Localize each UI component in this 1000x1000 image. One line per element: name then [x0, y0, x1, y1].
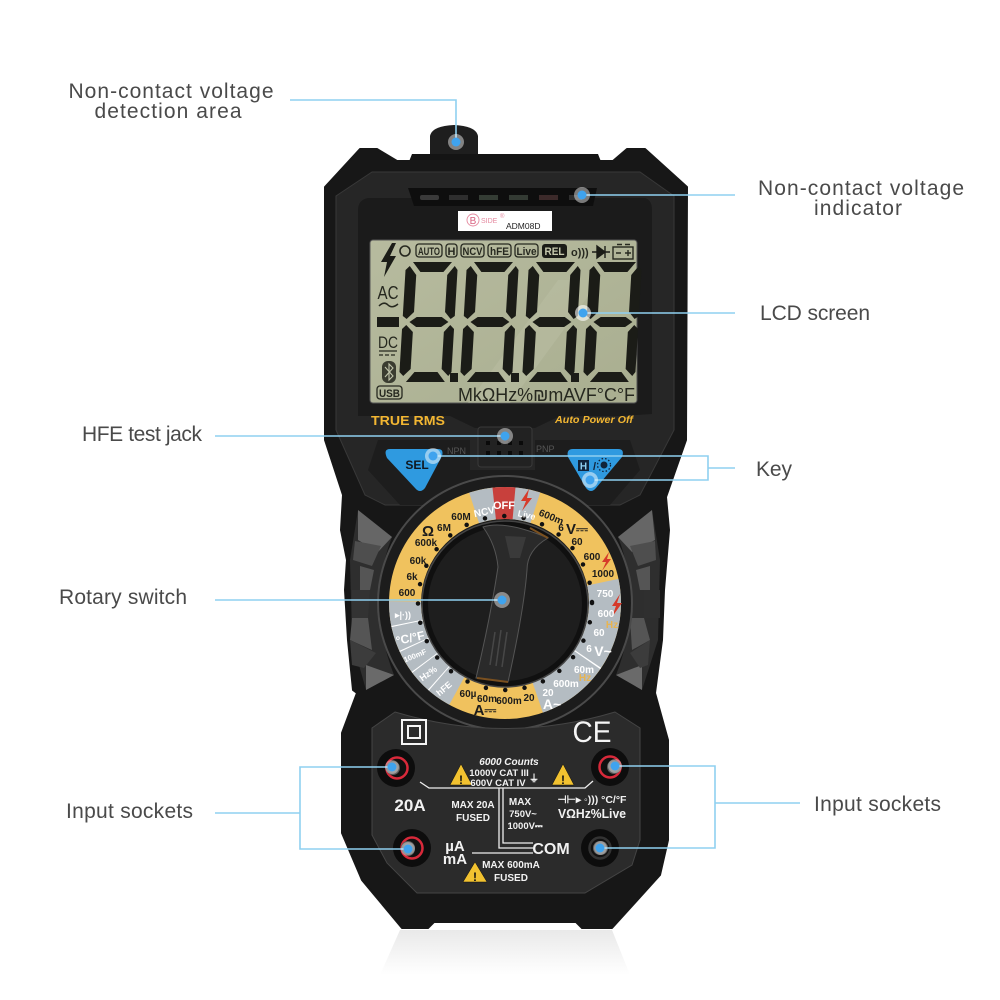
panel ratings text: 750V~ [509, 809, 537, 820]
callout: non-contact voltage indicator: Non-contact voltage [758, 177, 964, 200]
panel ratings text: FUSED [494, 873, 528, 884]
left grip [350, 510, 394, 690]
SEL button: SEL [405, 458, 429, 472]
dial grey scale labels: 100mF [402, 647, 428, 664]
dial yellow scale labels: 60k [410, 556, 427, 567]
dial grey scale labels: OFF [493, 500, 515, 512]
dial yellow scale labels: V⎓ [566, 521, 588, 538]
panel ratings text: 20A [394, 796, 426, 815]
dial yellow scale labels: 6 [558, 523, 564, 534]
warning marks [459, 773, 565, 884]
HFE test jack [447, 427, 555, 467]
reflection under meter [380, 930, 630, 975]
warning marks: ! [561, 773, 565, 787]
LED indicator strip [408, 188, 597, 206]
dial yellow scale labels: 60µ [460, 689, 477, 700]
LCD status icons: hFE [490, 246, 509, 258]
H backlight button [568, 449, 623, 491]
dial yellow scale labels: 600 [584, 552, 601, 563]
panel ratings text: MAX 600mA [482, 860, 540, 871]
warning marks: ! [459, 773, 463, 787]
panel ratings text: ⊣⊢▸ ◦))) °C/°F [558, 793, 627, 806]
display bezel [358, 198, 652, 428]
callout: HFE test jack: HFE test jack [82, 423, 202, 446]
dial yellow scale labels: 600m [496, 696, 522, 707]
panel ratings text: VΩHz%Live [558, 806, 626, 821]
dial grey scale labels: 60 [593, 628, 605, 639]
warning marks: ! [473, 870, 477, 884]
dial yellow scale labels: Ω [422, 523, 434, 540]
LCD unit row: MkΩHz%₪mAVF°C°F [458, 385, 635, 405]
panel ratings text: µA [445, 838, 465, 855]
dial grey scale labels: 750 [597, 589, 614, 600]
CE mark: CE [572, 716, 612, 749]
rotary dial scale [364, 462, 646, 744]
rotary switch knob [422, 521, 588, 687]
brand label: B [470, 216, 477, 227]
callout: key: Key [756, 458, 792, 481]
callout: non-contact voltage indicator [574, 177, 964, 220]
left grip band [350, 510, 394, 690]
callout: rotary switch [59, 586, 510, 609]
dial yellow scale labels: 60 [571, 537, 583, 548]
dial position dots [418, 516, 592, 690]
dial grey scale labels: 600 [598, 609, 615, 620]
LCD function labels: AC [378, 283, 398, 303]
double insulation icon [402, 720, 426, 744]
top probe: non-contact sensor [408, 125, 602, 164]
LCD status icons: o))) [571, 247, 589, 259]
panel ratings text: 1000V⎓ [507, 821, 543, 832]
SEL button [386, 449, 442, 491]
LCD function labels: DC [378, 333, 398, 352]
dial yellow scale labels: 1000 [592, 569, 615, 580]
panel ratings text: mA [443, 851, 467, 868]
callout: non-contact voltage detection area [68, 80, 464, 150]
callout: right input sockets: Input sockets [814, 793, 941, 816]
H backlight button: H [580, 462, 587, 472]
dial grey scale labels: Hz [579, 673, 591, 684]
seven segment digits 8888 [399, 262, 642, 382]
dial yellow scale labels: 6M [437, 523, 451, 534]
dial yellow scale labels: 600 [399, 588, 416, 599]
dial yellow scale labels: 60M [451, 512, 471, 523]
callout: HFE test jack [82, 423, 513, 446]
dial grey scale labels: 60m [574, 665, 594, 676]
callout: left input sockets [66, 760, 415, 856]
dial yellow scale labels: 600k [415, 538, 438, 549]
panel ratings text: ⏚ [529, 773, 539, 785]
dial grey scale labels: NCV [473, 505, 496, 520]
right grip band [616, 510, 660, 690]
LCD status icons: NCV [462, 246, 483, 258]
dial grey scale labels [394, 489, 622, 712]
panel ratings text: 600V CAT IV [470, 778, 526, 789]
brand label: SIDE [481, 218, 498, 225]
brand label [458, 211, 552, 231]
panel ratings text: 1000V CAT III [469, 768, 529, 779]
LCD status icons: AUTO [418, 246, 440, 258]
dial grey scale labels: °C/°F [395, 628, 426, 648]
callout: non-contact voltage detection area: Non-contact voltage [68, 80, 274, 103]
COM socket [581, 829, 619, 867]
dial grey scale labels: 600m [553, 679, 579, 690]
callout: right input sockets [593, 759, 941, 855]
LCD status icons: REL [544, 246, 565, 258]
panel ratings text [394, 757, 627, 884]
button surround [368, 440, 640, 505]
mA socket [393, 829, 431, 867]
callout: LCD screen: LCD screen [760, 302, 870, 325]
callout: non-contact voltage indicator: indicator [814, 197, 902, 220]
circuit lines [420, 781, 593, 853]
body inner face [336, 172, 674, 505]
LCD function labels [377, 283, 402, 400]
Auto Power Off label: Auto Power Off [554, 414, 635, 426]
TRUE RMS label: TRUE RMS [371, 413, 445, 428]
dial grey scale labels: ▸|·)) [394, 610, 411, 620]
dial grey scale labels: Live [517, 508, 536, 522]
LCD status icons: H [448, 246, 456, 258]
callout: key [425, 448, 792, 488]
dial surround [378, 476, 632, 730]
dial yellow scale labels: 20 [523, 693, 535, 704]
lower panel [372, 712, 640, 893]
dial grey scale labels: Hz [606, 620, 618, 631]
panel ratings text: FUSED [456, 813, 490, 824]
LCD status icons [381, 243, 633, 277]
callout: rotary switch: Rotary switch [59, 586, 187, 609]
dial yellow scale labels: 60m [477, 694, 497, 705]
callout: LCD screen [575, 302, 870, 325]
voltage socket [591, 748, 629, 786]
dial grey scale labels: 20 [542, 688, 554, 699]
dial yellow scale labels: A⎓ [474, 702, 496, 719]
LCD status icons: Live [516, 246, 536, 258]
brand label: ADM08D [506, 221, 540, 231]
meter body [325, 149, 687, 928]
LCD screen [370, 240, 642, 405]
right grip [616, 510, 660, 690]
dial grey scale labels: hFE [434, 679, 454, 698]
warning triangles [450, 764, 574, 882]
panel ratings text: MAX [509, 797, 531, 808]
brand label: ® [500, 213, 505, 220]
dial grey scale labels: 6 [586, 644, 592, 655]
dial grey scale labels: A~ [543, 696, 561, 712]
dial grey scale labels: V~ [594, 643, 612, 659]
HFE test jack: PNP [536, 444, 555, 454]
20A socket [377, 749, 415, 787]
dial yellow scale labels: 6k [406, 572, 418, 583]
HFE test jack: NPN [447, 446, 466, 456]
dial grey scale labels: Hz% [418, 664, 439, 683]
multimeter [325, 125, 687, 928]
knob pointer handle [476, 525, 548, 682]
panel ratings text: COM [532, 841, 570, 858]
callout: left input sockets: Input sockets [66, 800, 193, 823]
dial yellow scale labels: 600m [537, 508, 565, 528]
dial yellow scale labels [399, 508, 615, 719]
LCD function labels: USB [379, 388, 400, 400]
panel ratings text: 6000 Counts [479, 757, 539, 768]
callout: non-contact voltage detection area: detection area [94, 100, 242, 123]
panel ratings text: MAX 20A [451, 800, 495, 811]
H backlight button: / [593, 461, 596, 473]
